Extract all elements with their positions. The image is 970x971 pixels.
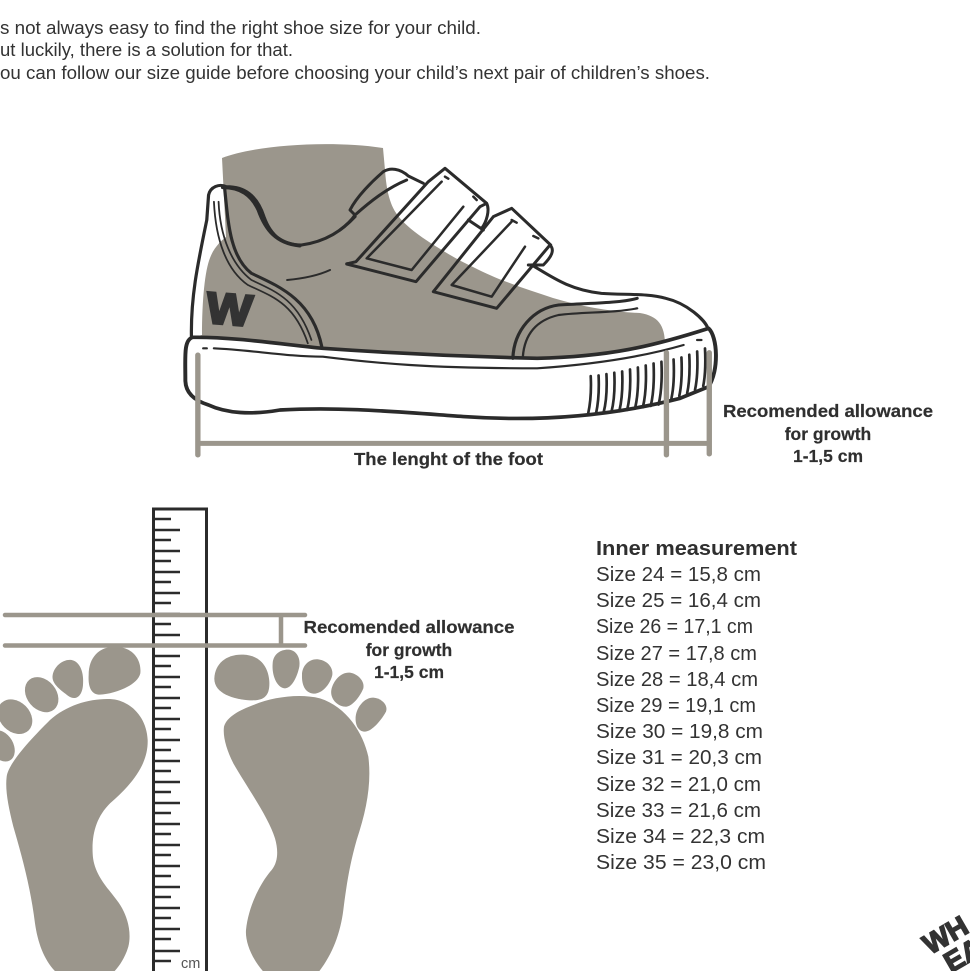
shoe outlines <box>185 185 716 418</box>
table heading: Inner measurement <box>596 537 797 560</box>
tongue loop <box>340 169 423 230</box>
size rows: Size 31 = 20,3 cm <box>596 747 762 769</box>
straps and tongue loop <box>340 168 552 308</box>
label: growth allowance upper: Recomended allowance <box>723 401 933 421</box>
label: length of foot: The lenght of the foot <box>354 449 543 469</box>
foot silhouette inside shoe <box>190 144 665 372</box>
ruler <box>153 509 206 971</box>
intro text: ou can follow our size guide before choosing your child’s next pair of children’s shoes. <box>0 63 710 83</box>
intro text: s not always easy to find the right shoe size for your child. <box>0 18 481 38</box>
size rows: Size 33 = 21,6 cm <box>596 800 761 822</box>
label: growth allowance lower: Recomended allowance <box>304 617 515 637</box>
size rows: Size 29 = 19,1 cm <box>596 695 756 717</box>
intro text <box>0 18 710 83</box>
label: growth allowance lower: 1-1,5 cm <box>374 662 444 682</box>
feet <box>0 647 386 971</box>
size rows: Size 24 = 15,8 cm <box>596 564 761 586</box>
size rows: Size 35 = 23,0 cm <box>596 852 766 874</box>
shoe sole fill <box>185 328 716 418</box>
size rows: Size 32 = 21,0 cm <box>596 774 761 796</box>
size rows: Size 26 = 17,1 cm <box>596 616 753 638</box>
size rows <box>596 564 766 874</box>
label: growth allowance lower <box>304 617 515 682</box>
label: growth allowance upper: 1-1,5 cm <box>793 446 863 466</box>
right foot <box>214 650 386 971</box>
size rows: Size 27 = 17,8 cm <box>596 643 757 665</box>
label: growth allowance upper: for growth <box>785 424 871 444</box>
size rows: Size 28 = 18,4 cm <box>596 669 758 691</box>
allowance lines <box>5 615 305 646</box>
label: growth allowance upper <box>723 401 933 466</box>
left foot <box>0 647 148 971</box>
strap two <box>433 208 552 308</box>
size rows: Size 34 = 22,3 cm <box>596 826 765 848</box>
size table <box>596 537 797 874</box>
ruler ticks <box>153 519 180 961</box>
size rows: Size 25 = 16,4 cm <box>596 590 761 612</box>
intro text: ut luckily, there is a solution for that. <box>0 40 293 60</box>
shoe illustration <box>185 144 716 455</box>
label: growth allowance lower: for growth <box>366 640 452 660</box>
size rows: Size 30 = 19,8 cm <box>596 721 763 743</box>
logo W on heel: W <box>204 283 254 336</box>
strap one <box>347 168 488 282</box>
measurement bracket <box>198 353 709 455</box>
